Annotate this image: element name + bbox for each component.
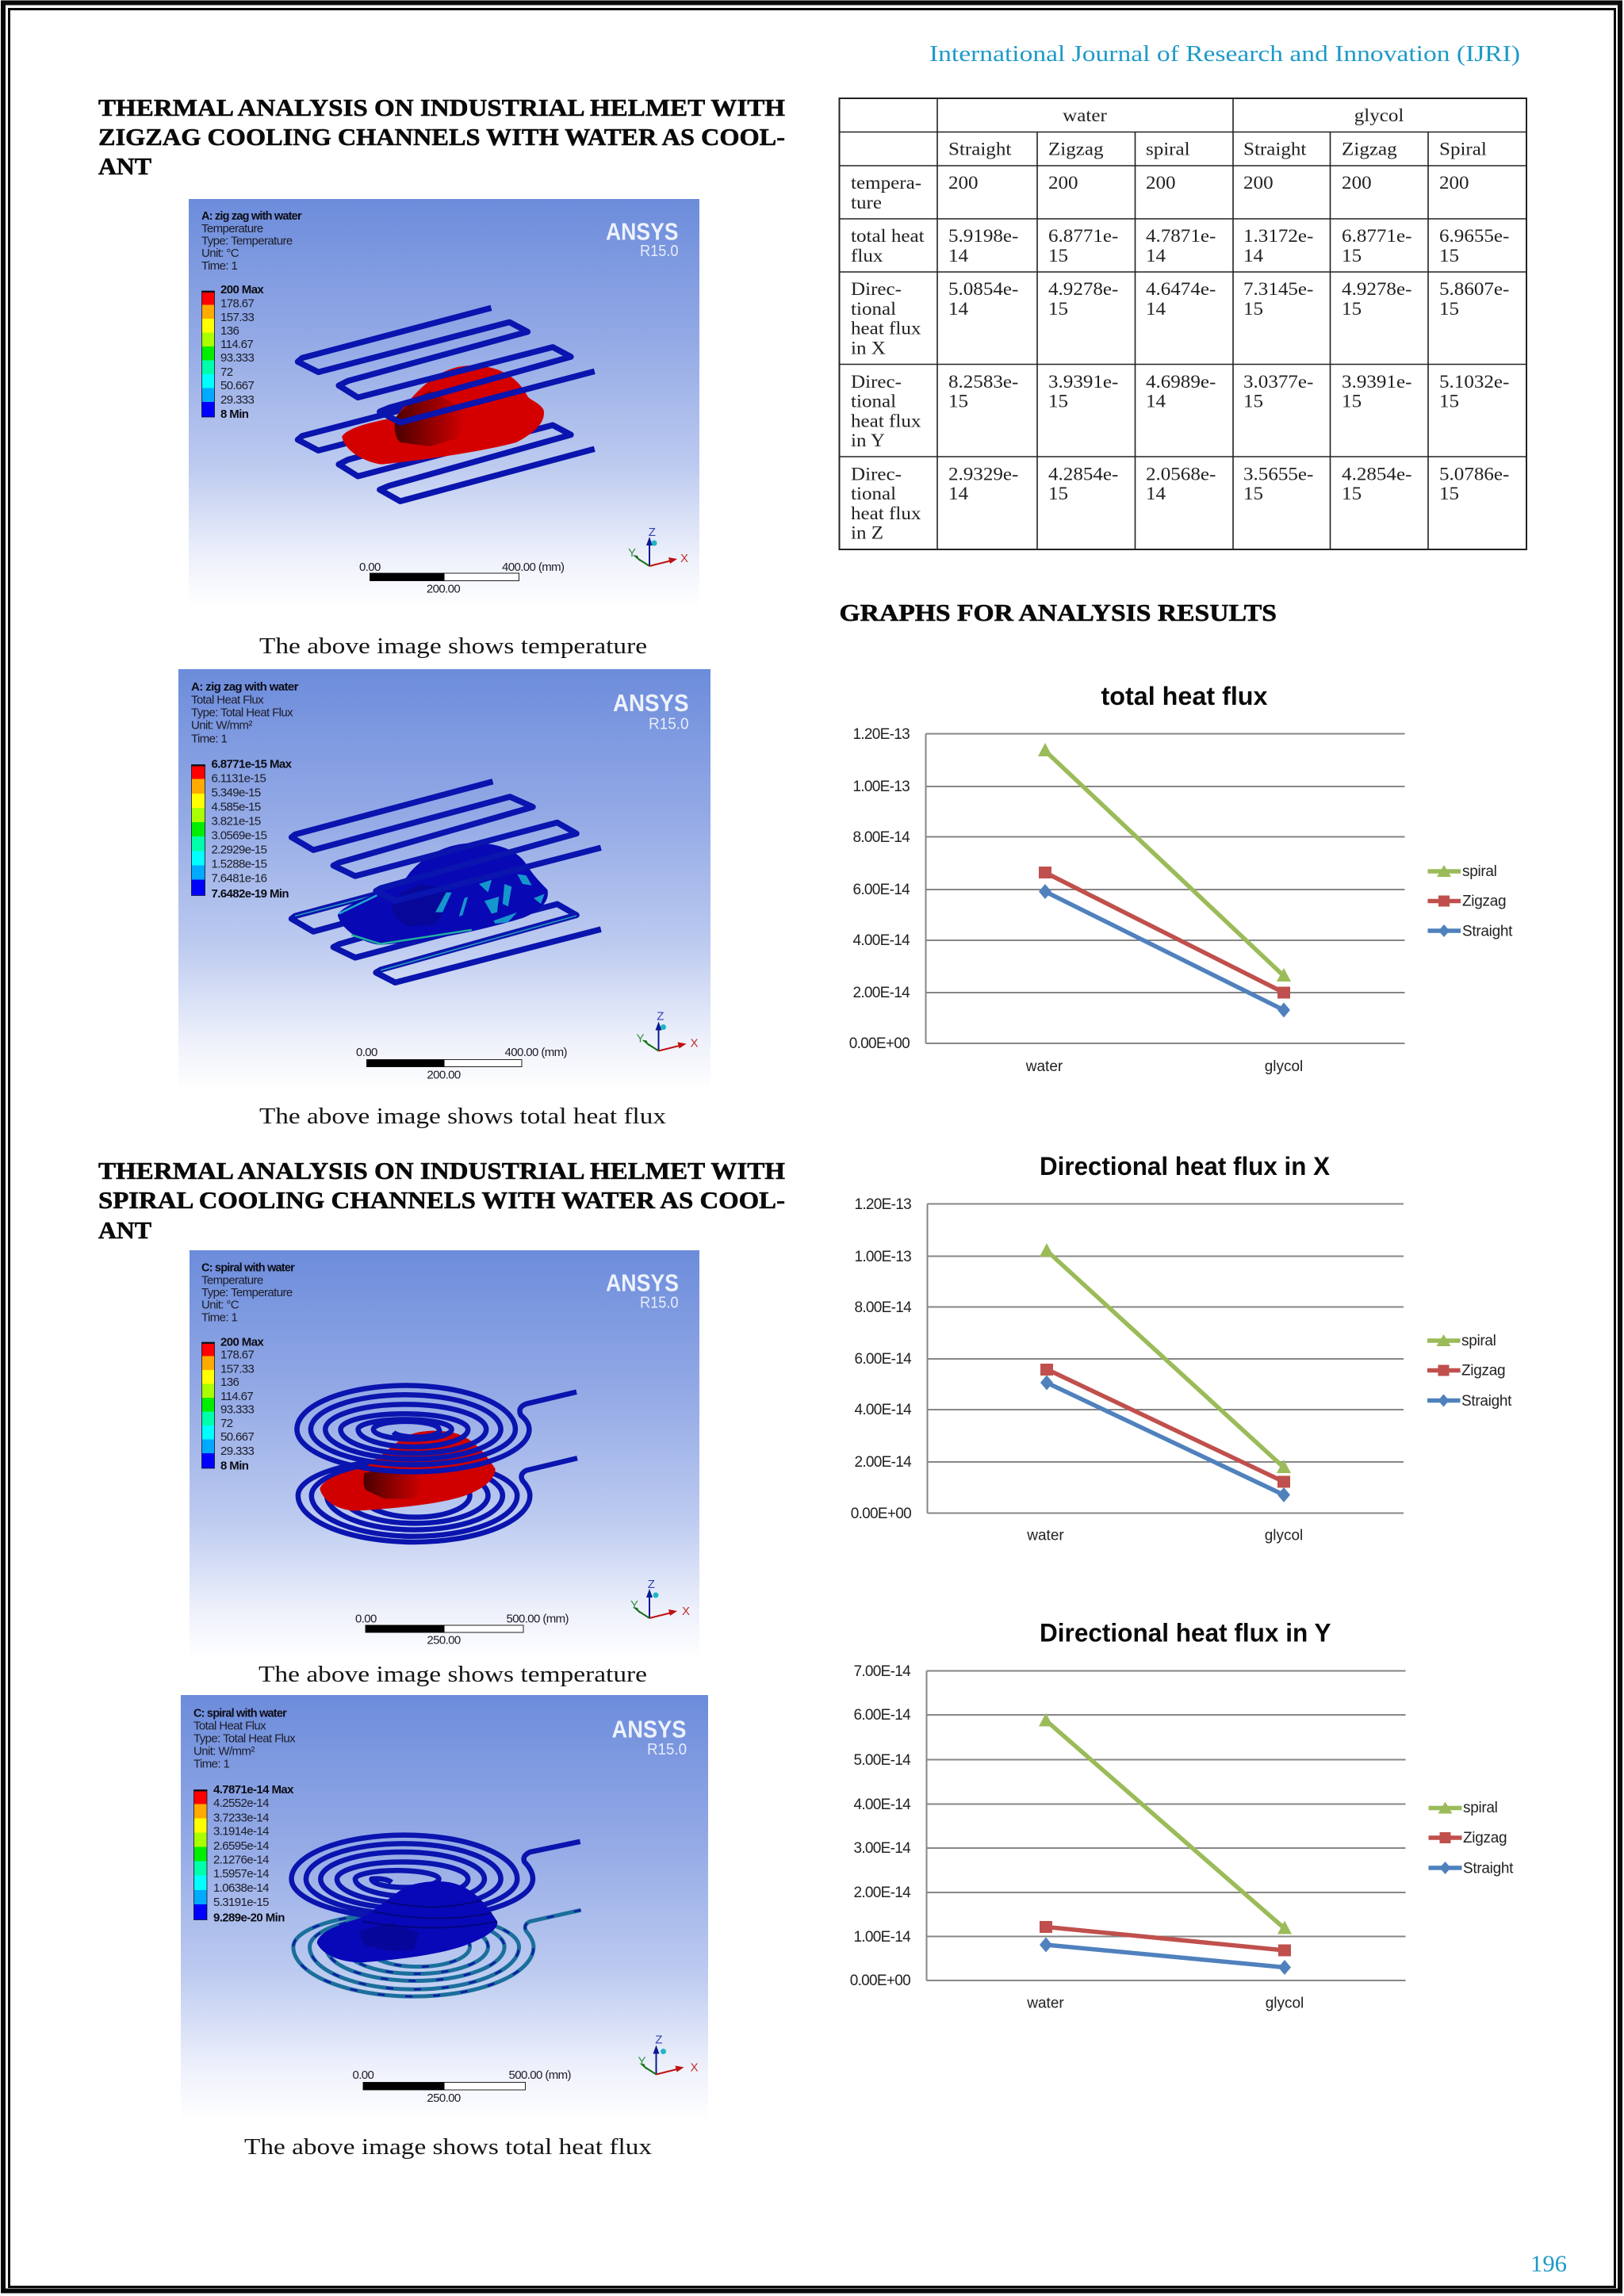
legend: Straight [1461,1393,1512,1410]
x axis labels [1026,1527,1303,1544]
y axis labels: 0.00E+00 [849,1035,910,1052]
axis triad [630,1578,690,1618]
panel: ANSYS zigzag temperature [189,199,699,607]
header row: coolants: water [1063,106,1107,126]
row: directional heat flux in Y: 5.1032e- [1439,373,1509,392]
row: directional heat flux in Z: 2.0568e- [1146,465,1216,484]
row: directional heat flux in X: 15 [1048,300,1068,320]
ANSYS logo [606,1269,679,1311]
gridlines and axis [928,1203,1404,1513]
row: directional heat flux in Z: 3.5655e- [1243,465,1313,484]
simulation info text: Time: 1 [201,1311,238,1324]
y axis labels: 2.00E-14 [853,1885,911,1901]
axis triad: X [682,1605,690,1618]
axis triad [638,2033,698,2074]
axis triad: Z [657,1010,664,1023]
row: directional heat flux in Y: Direc- [851,373,902,392]
heading: zigzag section [98,94,785,180]
ANSYS logo: ANSYS [606,217,679,246]
colour legend [201,283,264,421]
panel: ANSYS zigzag total heat flux [178,669,710,1091]
heading: spiral section: THERMAL ANALYSIS ON INDUSTRIAL HELMET WITH [98,1157,785,1184]
colour legend: 178.67 [220,297,255,311]
simulation info text: Temperature [201,1273,263,1288]
heading: zigzag section: ZIGZAG COOLING CHANNELS WITH WATER AS COOL- [98,123,785,151]
scale bar [352,2068,572,2105]
colour legend: 1.5288e-15 [211,858,267,871]
chart title: total heat flux [1101,682,1268,710]
row: total heat flux: 14 [1243,247,1263,266]
row: total heat flux: 15 [1342,247,1362,266]
row: directional heat flux in Y: 15 [1342,392,1362,411]
ANSYS logo: R15.0 [640,1294,679,1311]
axis triad: X [680,552,688,565]
colour legend: 2.1276e-14 [213,1854,269,1866]
row: total heat flux: 6.8771e- [1342,227,1411,247]
header row: channel types: Zigzag [1048,140,1104,159]
chart: directional heat flux in X [851,1152,1512,1544]
simulation info text: Time: 1 [191,733,228,745]
row: directional heat flux in X: Direc- [851,280,902,300]
simulation info text: A: zig zag with water [201,210,302,223]
scale bar [356,1046,568,1081]
heading: spiral section: SPIRAL COOLING CHANNELS WITH WATER AS COOL- [98,1186,785,1214]
colour legend: 72 [220,1417,233,1430]
header row: channel types [948,140,1487,159]
y axis labels: 2.00E-14 [852,985,910,1001]
simulation info text: Unit: W/mm² [191,718,252,733]
simulation info text: Unit: °C [201,247,239,260]
colour legend: 5.349e-15 [211,786,261,799]
row: total heat flux: flux [851,247,883,266]
row: total heat flux: 6.8771e- [1048,227,1118,247]
axis triad [636,1010,698,1051]
caption: temperature: The above image shows temperature [259,634,647,659]
row: directional heat flux in Z: 15 [1243,484,1263,504]
colour legend: 50.667 [220,1430,255,1444]
simulation info text: Unit: W/mm² [193,1744,255,1758]
y axis labels: 1.00E-13 [854,1249,911,1265]
x axis labels: glycol [1265,1527,1303,1544]
legend: spiral [1462,863,1497,880]
scale bar: 0.00 [352,2068,374,2082]
y axis labels: 4.00E-14 [853,1797,911,1813]
series: straight [1039,884,1290,1018]
row: total heat flux: 14 [1146,247,1166,266]
row: directional heat flux in Z: Direc- [851,465,902,484]
colour legend [201,1335,264,1473]
caption: spiral total heat flux: The above image shows total heat flux [244,2135,652,2160]
row: directional heat flux in Y: 3.9391e- [1342,373,1411,392]
legend [1427,1333,1512,1410]
scale bar: 250.00 [427,2091,461,2105]
row: temperature: 200 [1439,174,1469,193]
row: directional heat flux in X: 7.3145e- [1243,280,1313,300]
axis triad: Y [638,2055,645,2068]
header row: coolants: glycol [1354,106,1404,126]
row: directional heat flux in Z: 15 [1048,484,1068,504]
heading: graphs: GRAPHS FOR ANALYSIS RESULTS [839,599,1277,626]
row: directional heat flux in Y: 15 [1243,392,1263,411]
ANSYS logo: ANSYS [613,689,688,717]
row: directional heat flux in X: 15 [1342,300,1362,320]
row: temperature: 200 [1342,174,1372,193]
helmet with zigzag channels [298,308,595,501]
colour legend: 4.2552e-14 [213,1797,269,1810]
series: zigzag [1040,1921,1291,1957]
colour legend: 72 [220,365,233,379]
y axis labels: 2.00E-14 [854,1454,912,1471]
panel: ANSYS spiral temperature [190,1250,699,1660]
row: directional heat flux in Y: 14 [1146,392,1166,411]
row: temperature: 200 [1048,174,1078,193]
row: directional heat flux in Z: in Z [851,523,883,543]
scale bar [359,561,565,596]
row: directional heat flux in Z: tional [851,484,896,504]
colour legend: 157.33 [220,311,255,324]
header row: channel types: Straight [1243,140,1307,159]
row: directional heat flux in Z: 15 [1439,484,1459,504]
scale bar: 0.00 [356,1046,377,1059]
y axis labels: 0.00E+00 [850,1973,910,1989]
row: directional heat flux in X: 15 [1243,300,1263,320]
row: temperature: 200 [1146,174,1176,193]
header row: channel types: Straight [948,140,1012,159]
row: directional heat flux in Z: 14 [948,484,968,504]
row: temperature: 200 [948,174,979,193]
row: total heat flux: 4.7871e- [1146,227,1216,247]
y axis labels: 1.00E-14 [853,1929,911,1946]
row: directional heat flux in X: 4.9278e- [1342,280,1411,300]
panel: ANSYS spiral total heat flux [181,1695,708,2119]
axis triad: Y [628,546,636,560]
row: directional heat flux in Y: 3.9391e- [1048,373,1118,392]
ANSYS logo: R15.0 [649,715,688,733]
heading: zigzag section: THERMAL ANALYSIS ON INDUSTRIAL HELMET WITH [98,94,785,121]
journal header: International Journal of Research and Innovation (IJRI) [929,42,1520,67]
y axis labels: 8.00E-14 [852,829,910,846]
row: directional heat flux in X: tional [851,300,896,320]
y axis labels: 6.00E-14 [852,882,910,898]
simulation info text: Temperature [201,222,263,235]
colour legend: 1.0638e-14 [213,1881,269,1895]
y axis labels [851,1196,912,1522]
colour legend: 114.67 [220,338,253,351]
simulation info text: Total Heat Flux [193,1719,266,1733]
header row: channel types: Zigzag [1342,140,1397,159]
header row: channel types: Spiral [1439,140,1487,159]
series: zigzag [1040,1364,1290,1487]
colour legend: 114.67 [220,1390,253,1403]
simulation info text: Time: 1 [193,1757,230,1771]
y axis labels: 8.00E-14 [854,1299,912,1316]
colour legend: 178.67 [220,1348,255,1362]
x axis labels: water [1026,1527,1064,1544]
series: straight [1040,1375,1290,1502]
x axis labels: water [1026,1995,1064,2012]
axis triad: Y [630,1598,638,1612]
row: directional heat flux in Z [851,465,1509,543]
colour legend: 3.1914e-14 [213,1825,269,1838]
axis triad: Z [649,526,656,539]
page number: 196 [1530,2251,1567,2277]
chart title: Directional heat flux in Y [1040,1619,1331,1647]
results table [839,98,1526,549]
header row: channel types: spiral [1146,140,1190,159]
simulation info text: A: zig zag with water [191,680,299,694]
heading: zigzag section: ANT [98,152,151,180]
legend: Zigzag [1461,1362,1505,1380]
y axis labels: 5.00E-14 [853,1752,911,1769]
axis triad: X [690,2061,698,2074]
row: directional heat flux in Y: 4.6989e- [1146,373,1216,392]
ANSYS logo [612,1716,687,1758]
legend: spiral [1461,1333,1496,1349]
row: directional heat flux in X: heat flux [851,319,921,339]
row: directional heat flux in Y [851,373,1509,451]
simulation info text: Type: Total Heat Flux [193,1732,296,1746]
row: total heat flux: total heat [851,227,925,247]
simulation info text: Unit: °C [201,1299,239,1311]
row: directional heat flux in Z: 4.2854e- [1342,465,1411,484]
x axis labels [1026,1995,1304,2012]
ANSYS logo [613,689,688,733]
row: directional heat flux in Z: 14 [1146,484,1166,504]
colour legend: 200 Max [220,1335,264,1349]
simulation info text: Type: Temperature [201,235,293,247]
row: total heat flux [851,227,1509,266]
y axis labels [849,726,910,1052]
simulation info text: C: spiral with water [201,1262,295,1275]
x axis labels: glycol [1266,1995,1304,2012]
row: temperature: tempera- [851,174,921,193]
legend: Straight [1463,1860,1514,1877]
simulation info text [193,1708,296,1771]
row: directional heat flux in X: 4.9278e- [1048,280,1118,300]
row: directional heat flux in Y: tional [851,392,896,411]
row: directional heat flux in Y: in Y [851,431,885,451]
y axis labels [850,1663,911,1989]
scale bar: 400.00 (mm) [504,1046,568,1059]
row: directional heat flux in X [851,280,1509,358]
colour legend: 93.333 [220,1403,255,1416]
y axis labels: 6.00E-14 [854,1351,912,1368]
y axis labels: 1.00E-13 [852,779,910,795]
row: directional heat flux in Y: 15 [948,392,968,411]
y axis labels: 4.00E-14 [854,1402,912,1418]
colour legend: 7.6481e-16 [211,872,267,885]
row: total heat flux: 6.9655e- [1439,227,1509,247]
simulation info text [201,1262,295,1324]
colour legend: 2.6595e-14 [213,1839,269,1853]
x axis labels: glycol [1265,1058,1303,1075]
x axis labels [1025,1058,1303,1075]
row: directional heat flux in Y: 15 [1048,392,1068,411]
ANSYS logo: ANSYS [606,1269,679,1297]
row: directional heat flux in Z: 5.0786e- [1439,465,1509,484]
series: spiral [1039,1712,1292,1934]
row: directional heat flux in X: 14 [1146,300,1166,320]
row: directional heat flux in X: 5.0854e- [948,280,1018,300]
y axis labels: 6.00E-14 [853,1707,911,1724]
row: directional heat flux in Y: 8.2583e- [948,373,1018,392]
simulation info text: Type: Temperature [201,1286,293,1299]
scale bar: 200.00 [427,582,460,596]
row: temperature: 200 [1243,174,1274,193]
scale bar: 0.00 [355,1613,377,1625]
colour legend: 1.5957e-14 [213,1867,269,1881]
y axis labels: 7.00E-14 [853,1663,911,1680]
colour legend: 136 [220,1376,239,1389]
y axis labels: 1.20E-13 [854,1196,911,1213]
axis triad: Z [648,1578,655,1591]
row: total heat flux: 1.3172e- [1243,227,1313,247]
colour legend: 136 [220,324,239,338]
colour legend: 29.333 [220,393,255,407]
colour legend: 6.1131e-15 [211,772,266,785]
row: directional heat flux in X: in X [851,339,886,358]
colour legend: 3.821e-15 [211,815,261,828]
series: spiral [1040,1243,1291,1473]
ANSYS logo: R15.0 [647,1741,687,1758]
row: directional heat flux in Y: 3.0377e- [1243,373,1313,392]
series: zigzag [1039,867,1290,999]
heading: spiral section [98,1157,785,1244]
colour legend: 7.6482e-19 Min [211,887,289,901]
chart: total heat flux [849,682,1513,1075]
colour legend: 29.333 [220,1445,255,1458]
simulation info text: Total Heat Flux [191,693,264,707]
legend [1429,1800,1514,1877]
colour legend: 93.333 [220,351,255,365]
row: directional heat flux in Z: 4.2854e- [1048,465,1118,484]
row: directional heat flux in X: 5.8607e- [1439,280,1509,300]
colour legend: 2.2929e-15 [211,844,267,856]
row: directional heat flux in Y: 15 [1439,392,1459,411]
scale bar: 0.00 [359,561,381,574]
colour legend: 50.667 [220,379,255,392]
gridlines and axis [926,734,1405,1043]
scale bar [355,1613,569,1647]
scale bar: 500.00 (mm) [506,1613,569,1625]
helmet with zigzag channels, heat flux colouring [292,782,601,982]
table text [851,106,1509,543]
chart title: Directional heat flux in X [1040,1152,1331,1181]
colour legend: 200 Max [220,283,264,297]
axis triad [628,526,688,566]
row: directional heat flux in Z: 15 [1342,484,1362,504]
y axis labels: 0.00E+00 [851,1506,911,1522]
simulation info text: C: spiral with water [193,1708,287,1720]
axis triad: Z [655,2033,662,2047]
series: straight [1040,1938,1291,1975]
y axis labels: 1.20E-13 [852,726,910,743]
colour legend: 9.289e-20 Min [213,1911,285,1925]
row: temperature: ture [851,193,882,213]
caption: spiral temperature: The above image shows temperature [259,1663,647,1687]
row: total heat flux: 15 [1048,247,1068,266]
row: directional heat flux in Z: 2.9329e- [948,465,1018,484]
ANSYS logo: R15.0 [640,243,679,260]
legend: Zigzag [1463,1830,1507,1846]
y axis labels: 3.00E-14 [853,1840,911,1857]
helmet with spiral channels, heat flux colouring [292,1835,581,1996]
colour legend [193,1783,294,1925]
x axis labels: water [1025,1058,1063,1075]
colour legend: 4.7871e-14 Max [213,1783,294,1797]
colour legend: 3.0569e-15 [211,829,267,842]
row: total heat flux: 14 [948,247,968,266]
scale bar: 250.00 [427,1633,461,1647]
y axis labels: 4.00E-14 [852,932,910,949]
legend [1427,863,1513,940]
header row: coolants [1063,106,1404,126]
row: directional heat flux in X: 14 [948,300,968,320]
series: spiral [1038,743,1291,982]
row: directional heat flux in X: 15 [1439,300,1459,320]
simulation info text: Time: 1 [201,259,238,273]
legend: Zigzag [1462,893,1506,910]
row: directional heat flux in X: 4.6474e- [1146,280,1216,300]
colour legend [192,758,293,901]
scale bar: 500.00 (mm) [509,2068,572,2082]
scale bar: 400.00 (mm) [502,561,565,574]
scale bar: 200.00 [427,1069,461,1081]
heading: spiral section: ANT [98,1216,151,1244]
colour legend: 157.33 [220,1362,255,1376]
simulation info text [201,210,302,273]
axis triad: Y [636,1032,644,1045]
gridlines and axis [926,1671,1405,1980]
row: directional heat flux in Z: heat flux [851,504,921,524]
ANSYS logo [606,217,679,260]
colour legend: 5.3191e-15 [213,1896,269,1909]
colour legend: 4.585e-15 [211,801,261,813]
axis triad: X [690,1037,698,1050]
colour legend: 8 Min [220,408,249,421]
row: total heat flux: 5.9198e- [948,227,1018,247]
row: directional heat flux in Y: heat flux [851,411,921,431]
row: temperature [851,174,1469,213]
legend: spiral [1463,1800,1498,1816]
simulation info text: Type: Total Heat Flux [191,706,293,720]
colour legend: 8 Min [220,1459,249,1473]
simulation info text [191,680,299,745]
colour legend: 3.7233e-14 [213,1811,269,1825]
colour legend: 6.8771e-15 Max [211,758,293,771]
caption: total heat flux: The above image shows total heat flux [259,1104,666,1129]
row: total heat flux: 15 [1439,247,1459,266]
ANSYS logo: ANSYS [612,1716,687,1743]
chart: directional heat flux in Y [850,1619,1514,2012]
legend: Straight [1462,923,1513,940]
helmet with spiral channels [297,1385,577,1542]
